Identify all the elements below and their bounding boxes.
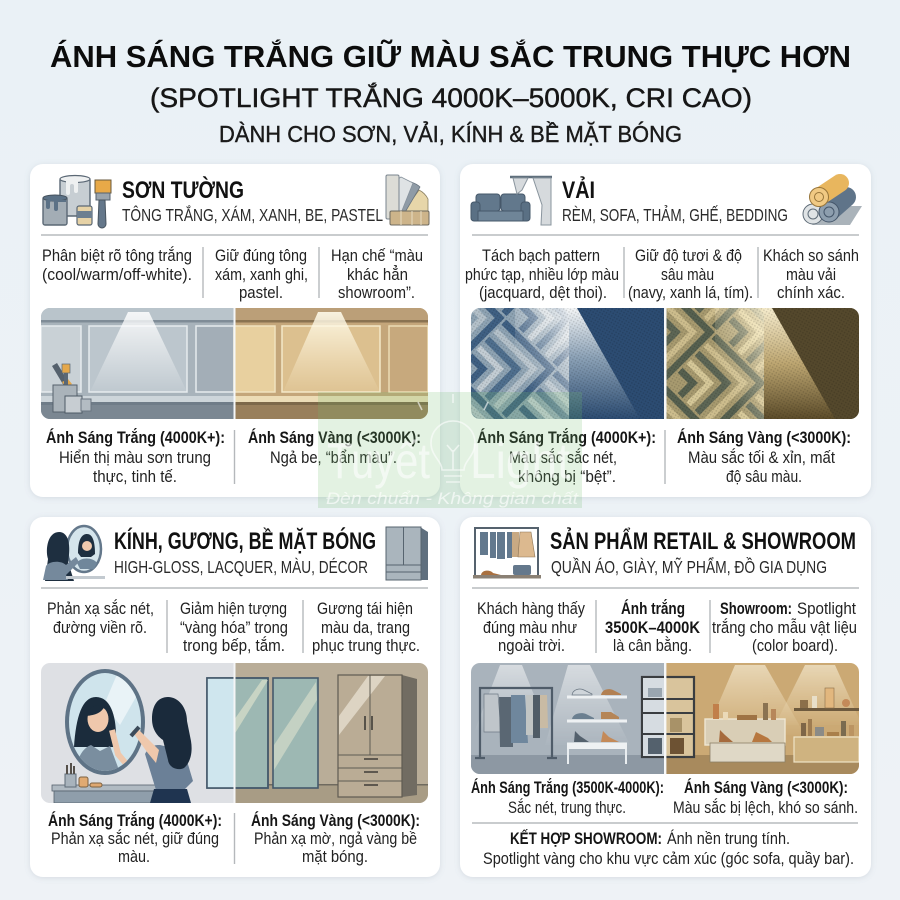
benefit column 1: đúng màu như [483,618,577,637]
caption: warm light: Phản xạ mờ, ngả vàng bề [254,829,417,848]
benefit column 1: Phản xạ sắc nét, [47,599,154,618]
title block [50,38,851,147]
benefit column 3: màu da, trang [321,618,410,637]
caption: warm light [677,428,851,486]
benefit column 3: Showroom: [720,599,792,618]
benefit column 3: phục trung thực. [312,636,420,655]
benefit column 2: trong bếp, tắm. [183,636,285,655]
caption: white light: không bị “bệt”. [518,467,616,486]
divider [41,234,428,236]
benefit column 1: đường viền rõ. [53,618,147,637]
icon: sofa and curtain [471,177,552,225]
benefit column 2: (navy, xanh lá, tím). [628,283,753,302]
wardrobe [338,675,417,797]
heading: KÍNH, GƯƠNG, BỀ MẶT BÓNG [114,527,376,555]
icon: fabric rolls [803,183,862,225]
caption: warm light: Ngả be, “bẩn màu”. [270,448,397,467]
benefit column 3: Gương tái hiện [317,599,413,618]
caption: warm light [673,778,858,817]
caption: warm light: Ánh Sáng Vàng (<3000K): [677,428,851,447]
icon: clothes rack [473,527,541,578]
title block: ÁNH SÁNG TRẮNG GIỮ MÀU SẮC TRUNG THỰC HƠN [50,38,851,74]
showroom combination note: Ánh nền trung tính. [667,829,790,848]
benefit column 3: màu vải [786,265,836,284]
divider [41,587,428,589]
subheading: QUẦN ÁO, GIÀY, MỸ PHẨM, ĐỒ GIA DỤNG [551,556,827,577]
mirror with reflection [65,669,145,778]
benefit column 2 [180,599,288,655]
caption: white light: Ánh Sáng Trắng (4000K+): [477,428,656,447]
caption: warm light: độ sâu màu. [726,467,802,486]
caption: white light: Hiển thị màu sơn trung [59,448,211,467]
caption: warm light: mặt bóng. [302,847,368,866]
benefit column 2: 3500K–4000K [605,618,701,637]
caption: warm light: Màu sắc bị lệch, khó so sánh. [673,798,858,817]
icon: woman at mirror [43,526,105,581]
panel: sơn tường [30,164,440,497]
benefit column 2: “vàng hóa” trong [180,618,288,637]
panel: sản phẩm retail [460,517,871,877]
watermark: Tuyết [327,433,430,489]
image: mirror and glossy surfaces [41,663,428,803]
caption: white light: Ánh Sáng Trắng (4000K+): [48,811,222,830]
benefit column 2 [215,246,308,302]
benefit column 3: Hạn chế “màu [331,246,423,265]
shelving unit [642,677,694,757]
caption: white light: Ánh Sáng Trắng (3500K-4000K): [471,778,664,797]
small paint cans [52,363,91,413]
caption: white light: Sắc nét, trung thực. [508,798,626,817]
icon: colour fan deck [386,175,429,225]
benefit column 2: là cân bằng. [613,636,692,655]
showroom combination note: KẾT HỢP SHOWROOM: [510,829,662,848]
heading: VẢI [562,175,595,204]
divider [472,587,859,589]
benefit column 3 [312,599,420,655]
benefit column 3 [712,599,857,655]
caption: warm light: Ánh Sáng Vàng (<3000K): [684,778,848,797]
title block: (SPOTLIGHT TRẮNG 4000K–5000K, CRI CAO) [150,82,752,113]
image: wall under white and warm light [41,308,428,419]
caption: white light [48,811,222,866]
caption: white light: Màu sắc sắc nét, [509,448,617,467]
icon: wardrobe [386,527,428,580]
image: retail showroom [471,663,862,774]
benefit column 2 [628,246,753,302]
benefit column 3: Spotlight [797,599,856,618]
benefit column 3 [331,246,423,302]
caption: white light: Phản xạ sắc nét, giữ đúng [51,829,219,848]
benefit column 2 [605,599,701,655]
caption: warm light: Ánh Sáng Vàng (<3000K): [251,811,420,830]
benefit column 1: ngoài trời. [498,636,565,655]
watermark: Light [470,433,570,489]
benefit column 2: Giữ độ tươi & độ [635,246,742,265]
benefit column 2: pastel. [239,283,283,302]
divider [472,822,858,824]
caption: white light [46,428,225,486]
benefit column 1: (jacquard, dệt thoi). [479,283,607,302]
panel: vải [460,164,871,497]
caption: white light: màu. [118,847,150,866]
benefit column 3: trắng cho mẫu vật liệu [712,618,857,637]
benefit column 3: showroom”. [338,283,415,302]
benefit column 2: Giảm hiện tượng [180,599,287,618]
subheading: RÈM, SOFA, THẢM, GHẾ, BEDDING [562,204,788,225]
caption: warm light: Màu sắc tối & xỉn, mất [688,448,835,467]
caption: warm light [251,811,420,866]
benefit column 2: Giữ đúng tông [215,246,307,265]
benefit column 2: sâu màu [661,265,714,284]
benefit column 3: chính xác. [777,283,845,302]
title block: DÀNH CHO SƠN, VẢI, KÍNH & BỀ MẶT BÓNG [219,119,682,147]
icon: paint cans and brush [43,176,111,228]
benefit column 1: Phân biệt rõ tông trắng [42,246,192,265]
panel: kính, gương [30,517,440,877]
watermark [318,392,582,508]
subheading: TÔNG TRẮNG, XÁM, XANH, BE, PASTEL [122,204,383,225]
caption: white light: Ánh Sáng Trắng (4000K+): [46,428,225,447]
benefit column 2: xám, xanh ghi, [215,265,308,284]
caption: warm light [248,428,421,467]
caption: white light [477,428,656,486]
icon: watermark bulb [418,394,488,482]
caption: white light: thực, tinh tế. [93,467,177,486]
benefit column 1: (cool/warm/off-white). [42,265,192,284]
display counters and cosmetics [705,688,859,762]
vanity table [52,763,162,803]
benefit column 2: Ánh trắng [621,599,685,618]
benefit column 1: Khách hàng thấy [477,599,585,618]
showroom combination note [483,829,854,868]
benefit column 1 [465,246,619,302]
benefit column 3: Khách so sánh [763,246,859,265]
shoe shelves [567,689,627,764]
heading: SƠN TƯỜNG [122,176,244,204]
benefit column 1 [477,599,585,655]
caption: white light [471,778,664,817]
benefit column 3 [763,246,859,302]
benefit column 1 [42,246,192,284]
benefit column 1: Tách bạch pattern [482,246,600,265]
image: fabric under white and warm light [471,308,859,419]
clothes rack [475,688,557,758]
watermark: Đèn chuẩn - Không gian chất [326,489,579,508]
windows [207,678,318,788]
benefit column 3: khác hẳn [347,265,408,284]
subheading: HIGH-GLOSS, LACQUER, MÀU, DÉCOR [114,557,368,577]
woman applying makeup [131,697,193,803]
benefit column 1 [47,599,154,637]
benefit column 1: phức tạp, nhiều lớp màu [465,265,619,284]
caption: warm light: Ánh Sáng Vàng (<3000K): [248,428,421,447]
divider [472,234,859,236]
benefit column 3: (color board). [752,636,838,655]
